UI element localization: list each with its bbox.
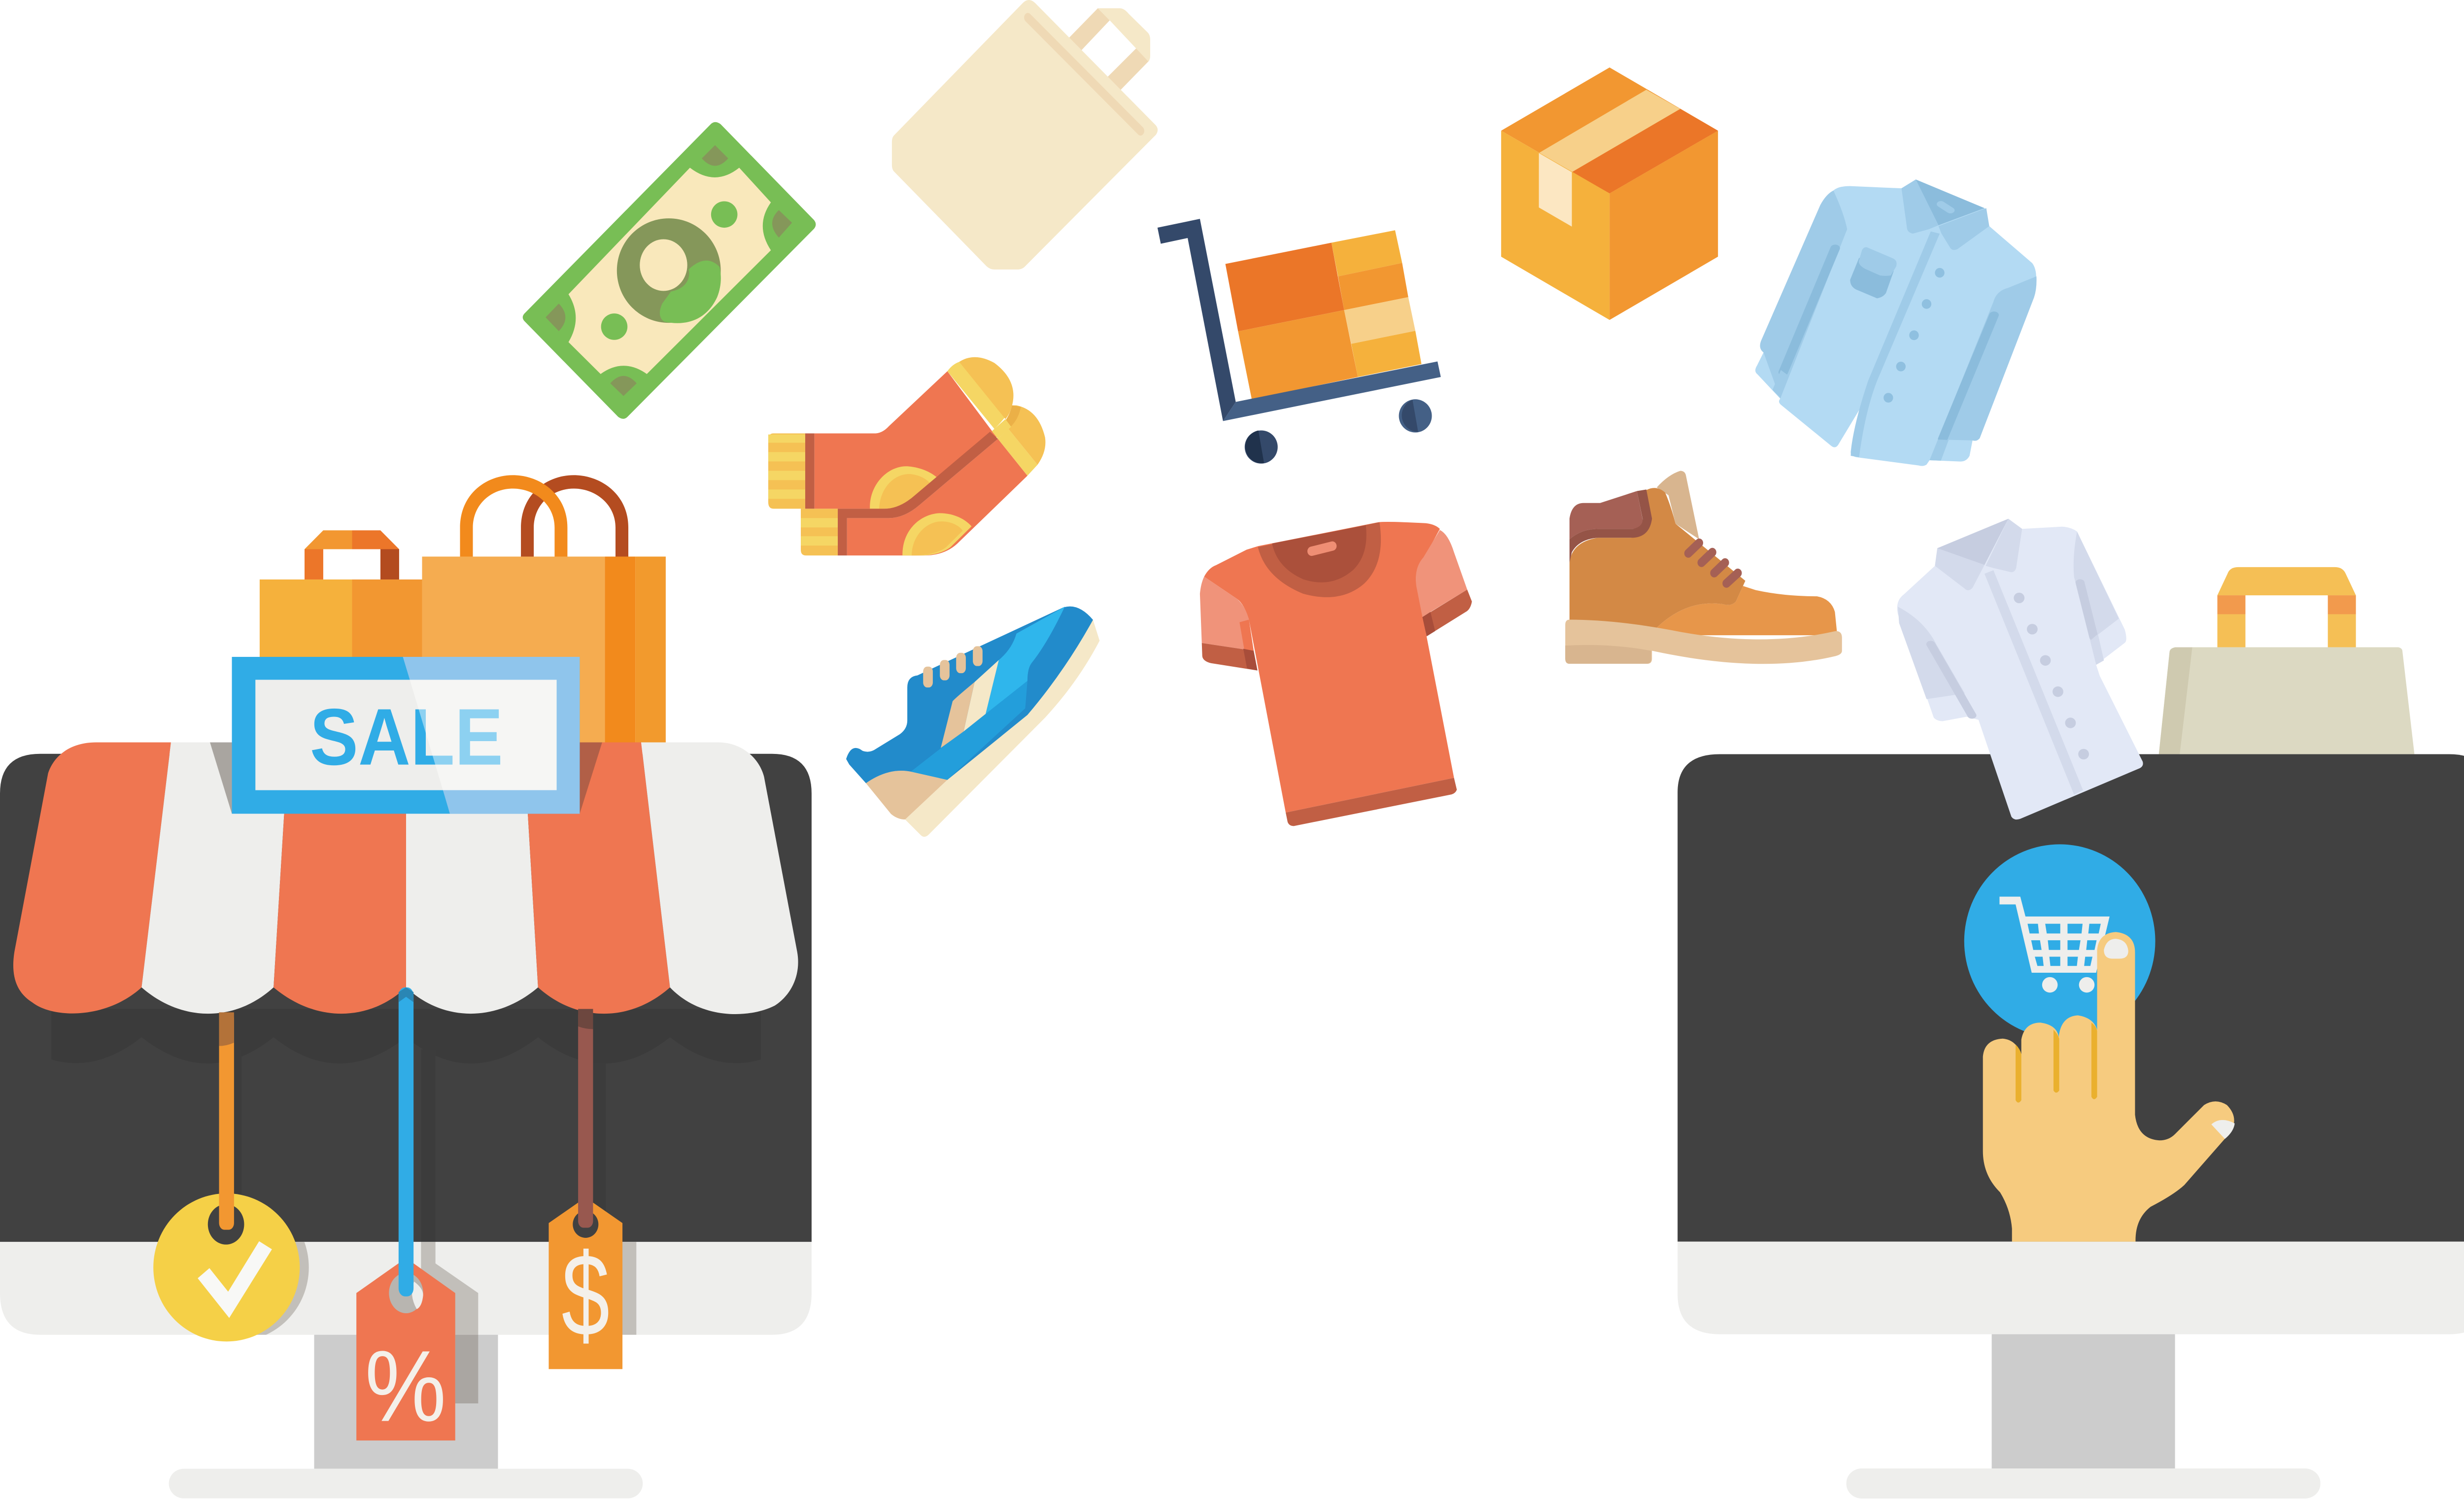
icon: orange t-shirt [1200,522,1472,826]
monitor chin [0,1242,812,1335]
blue cart button [1964,844,2156,1038]
percent tag on blue string [356,988,455,1443]
left shop monitor scene [0,475,812,1499]
icon: banknote [523,122,816,419]
dollar sign: $ [561,1230,610,1361]
sale sign [232,657,580,814]
shopping bags behind sign [260,475,666,743]
striped awning [13,743,798,1014]
right beige bag [2159,567,2414,754]
shirts [1755,179,2143,819]
icon: cream tote bag [892,0,1158,270]
monitor chin [1677,1242,2464,1334]
icon: blue sneaker [846,607,1099,837]
upper sock [768,357,1013,509]
awning shadow [51,1009,761,1063]
right monitor scene [1677,754,2464,1499]
scattered items group two [1158,68,1842,826]
monitor stand [314,1335,498,1469]
tag shadows [163,1049,636,1403]
monitor stand [1992,1334,2175,1468]
sale text: SALE [310,692,503,782]
monitor screen [0,754,812,1242]
icon: hand truck with boxes [1158,219,1441,464]
scattered items group one [523,0,1158,837]
icon: pair of socks [768,357,1045,555]
icon: shopping cart [1999,897,2110,992]
lower sock [801,406,1045,555]
icon: periwinkle shirt [1897,519,2143,819]
dollar tag on brown string [548,1009,622,1369]
icon: pointing hand [1983,932,2235,1242]
percent sign: % [365,1330,446,1443]
monitor screen [1677,754,2464,1242]
monitor base [1847,1468,2321,1499]
icon: cardboard box [1501,68,1718,320]
icon: light blue shirt [1755,179,2037,466]
monitor base [169,1469,643,1499]
icon: leather boot [1565,471,1842,664]
check tag on orange string [153,1012,300,1341]
